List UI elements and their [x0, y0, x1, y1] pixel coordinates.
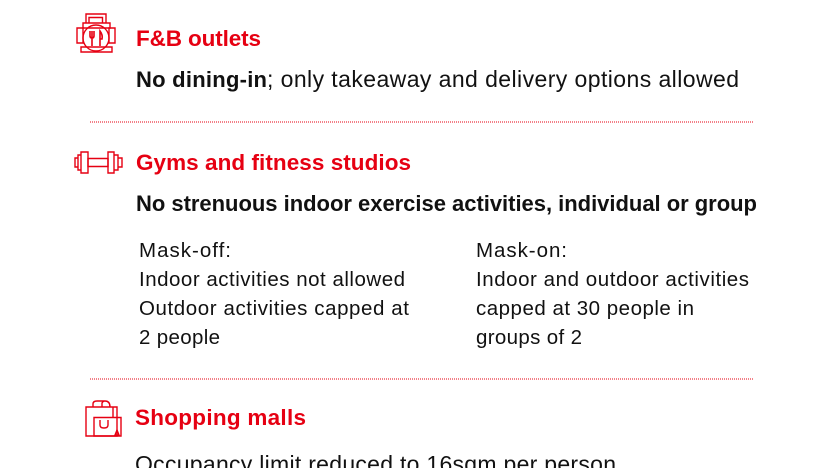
text: F&B rule: No dining-in: [136, 67, 267, 92]
text: mask-off column: Outdoor activities capped at: [139, 297, 409, 320]
icon: dumbbell: [75, 152, 122, 173]
text: mask-on column: Mask-on:: [476, 239, 567, 262]
icon: shopping bags: [86, 401, 121, 436]
text: mask-on column: Indoor and outdoor activities: [476, 268, 749, 291]
text: mask-off column: Indoor activities not allowed: [139, 268, 405, 291]
text: mask-on column: groups of 2: [476, 326, 582, 349]
heading: Shopping malls: Shopping malls: [135, 405, 306, 430]
text: mask-off column: [139, 239, 409, 349]
text: mask-on column: [476, 239, 749, 349]
icon: food outlet: [77, 14, 115, 52]
divider: [90, 121, 753, 123]
text: F&B rule: ; only takeaway and delivery options allowed: [267, 66, 739, 92]
text: mask-off column: Mask-off:: [139, 239, 231, 262]
heading: Gyms and fitness studios: Gyms and fitness studios: [136, 150, 411, 175]
text: gym rule: No strenuous indoor exercise activities, individual or group: [136, 191, 757, 216]
text: mask-on column: capped at 30 people in: [476, 297, 694, 320]
text: mask-off column: 2 people: [139, 326, 220, 349]
divider: [90, 378, 753, 380]
heading: F&B outlets: F&B outlets: [136, 26, 261, 51]
